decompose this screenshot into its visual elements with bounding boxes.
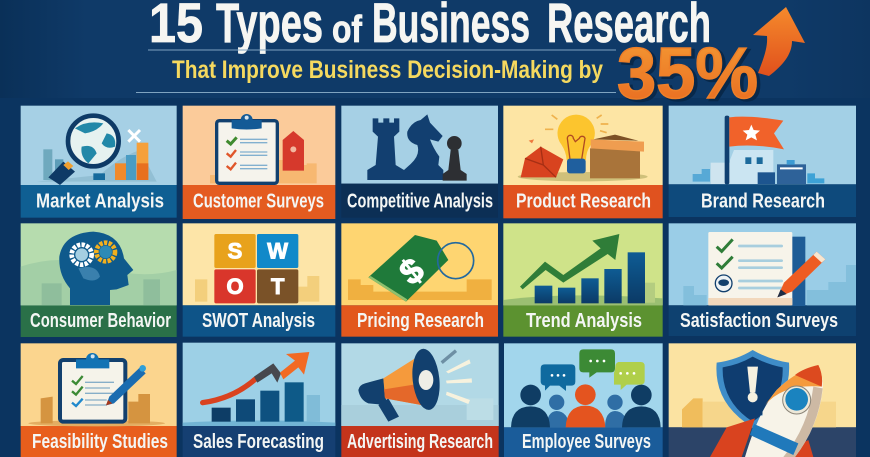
panel: SWOT Analysis: W [267,239,288,264]
panel: Feasibility Studies [21,343,177,457]
35 percent figure: 35% [617,34,758,114]
label: SWOT Analysis [202,310,315,332]
label: Consumer Behavior [30,310,171,332]
panel: Trend Analysis [503,223,663,337]
label: Sales Forecasting [193,431,324,453]
35 percent figure: 35% [620,36,761,116]
panel: Employee Surveys [504,343,663,457]
label: Customer Surveys [193,190,324,212]
label: Product Research [516,190,651,212]
panel: Product Research [503,106,663,218]
panel: Pricing Research [341,223,498,337]
icon: rising arrow [753,7,805,76]
label: Trend Analysis [526,310,642,332]
label: Market Analysis [36,190,164,212]
label: Pricing Research [357,310,484,332]
panel: Sales Forecasting [183,343,335,457]
panel: SWOT Analysis: T [271,274,285,299]
panel: Consumer Behavior [21,223,177,337]
subtitle: That Improve Business Decision-Making by [172,56,603,84]
title: of [332,9,362,51]
panel: Pricing Research: $ [393,251,431,293]
panel: Competitive Analysis [341,106,498,218]
icon: rocket [710,365,823,457]
panel: Customer Surveys [183,106,335,219]
panel: Advertising Research [341,343,499,457]
panel: SWOT Analysis: O [226,274,244,299]
title [149,0,711,54]
label: Employee Surveys [522,431,651,453]
panel: rocket and shield [669,343,856,457]
icon: shield [716,350,789,427]
label: Feasibility Studies [32,431,168,453]
panel: Satisfaction Surveys [669,223,856,336]
panel: Brand Research [669,106,856,217]
panel: Market Analysis [21,106,177,218]
panel: SWOT Analysis [183,223,335,337]
label: Brand Research [701,190,825,212]
panel: SWOT Analysis: S [228,239,242,264]
label: Competitive Analysis [347,190,493,212]
label: Advertising Research [347,431,493,453]
